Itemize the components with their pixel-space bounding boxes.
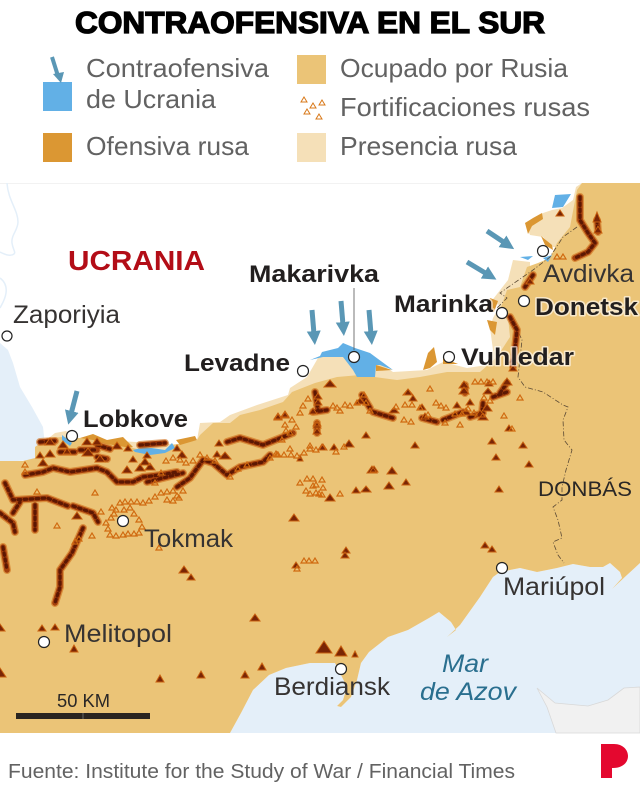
- label: Makarivka: [249, 261, 380, 362]
- river Dnipro: [0, 183, 45, 462]
- label: Tokmak: [118, 516, 234, 553]
- area: contraofensiva de Ucrania: [62, 194, 571, 455]
- legend: presencia rusa: Presencia rusa: [340, 131, 518, 161]
- label: Melitopol: Melitopol: [64, 620, 172, 648]
- label: Lobkove: Lobkove: [83, 406, 188, 433]
- frontier line: [497, 227, 577, 563]
- label: Berdiansk: Berdiansk: [274, 673, 391, 701]
- legend: fortificaciones rusas: Fortificaciones rusas: [340, 92, 590, 122]
- logo: [601, 744, 628, 778]
- fortifications: open triangles: [22, 254, 566, 571]
- map: [0, 183, 640, 733]
- label: Vuhledar: Vuhledar: [461, 344, 574, 371]
- legend: ocupado por Rusia: Ocupado por Rusia: [340, 53, 569, 83]
- label: Lobkove: [66, 406, 188, 442]
- label: Donetsk: Donetsk: [535, 294, 639, 321]
- area: presencia rusa: [40, 183, 590, 470]
- label: Mariúpol: [496, 562, 605, 601]
- label: Levadne: Levadne: [184, 350, 290, 377]
- label: Zaporiyia: [2, 301, 120, 341]
- label: Zaporiyia: Zaporiyia: [13, 301, 120, 329]
- label: Avdivka: [538, 246, 634, 288]
- area: ocupado por Rusia: [0, 183, 640, 733]
- legend: contraofensiva de Ucrania: de Ucrania: [86, 84, 217, 114]
- label: Mar de Azov: Mar: [442, 650, 490, 678]
- legend: ofensiva rusa: Ofensiva rusa: [86, 131, 250, 161]
- fortifications: isolated positions: [0, 210, 602, 682]
- land background: Ukraine: [0, 183, 640, 733]
- source: Fuente: Institute for the Study of War / Financial Times: [8, 761, 515, 783]
- label: Mar de Azov: [420, 650, 518, 706]
- label: DONBÁS: DONBÁS: [538, 478, 632, 501]
- label: Avdivka: Avdivka: [543, 260, 634, 288]
- land: south-east Russia: [537, 687, 640, 733]
- label: Marinka: Marinka: [394, 291, 494, 318]
- scale bar: 50 KM: [57, 691, 110, 711]
- label: Tokmak: Tokmak: [144, 525, 234, 553]
- label: Mariúpol: Mariúpol: [503, 573, 605, 601]
- sea of Azov: [118, 563, 640, 733]
- fortifications: dense lines: [0, 197, 598, 603]
- arrows: Ukrainian counteroffensive: [71, 231, 505, 414]
- legend: contraofensiva de Ucrania: Contraofensiva: [86, 53, 270, 83]
- title: CONTRAOFENSIVA EN EL SUR: [75, 5, 545, 40]
- area: ofensiva rusa: [80, 213, 553, 447]
- legend: contraofensiva de Ucrania: [43, 53, 270, 114]
- label: Makarivka: Makarivka: [249, 261, 380, 288]
- label: Mar de Azov: de Azov: [420, 678, 518, 706]
- label: UCRANIA: UCRANIA: [68, 245, 205, 276]
- legend: [43, 53, 590, 162]
- scale bar: [16, 691, 150, 719]
